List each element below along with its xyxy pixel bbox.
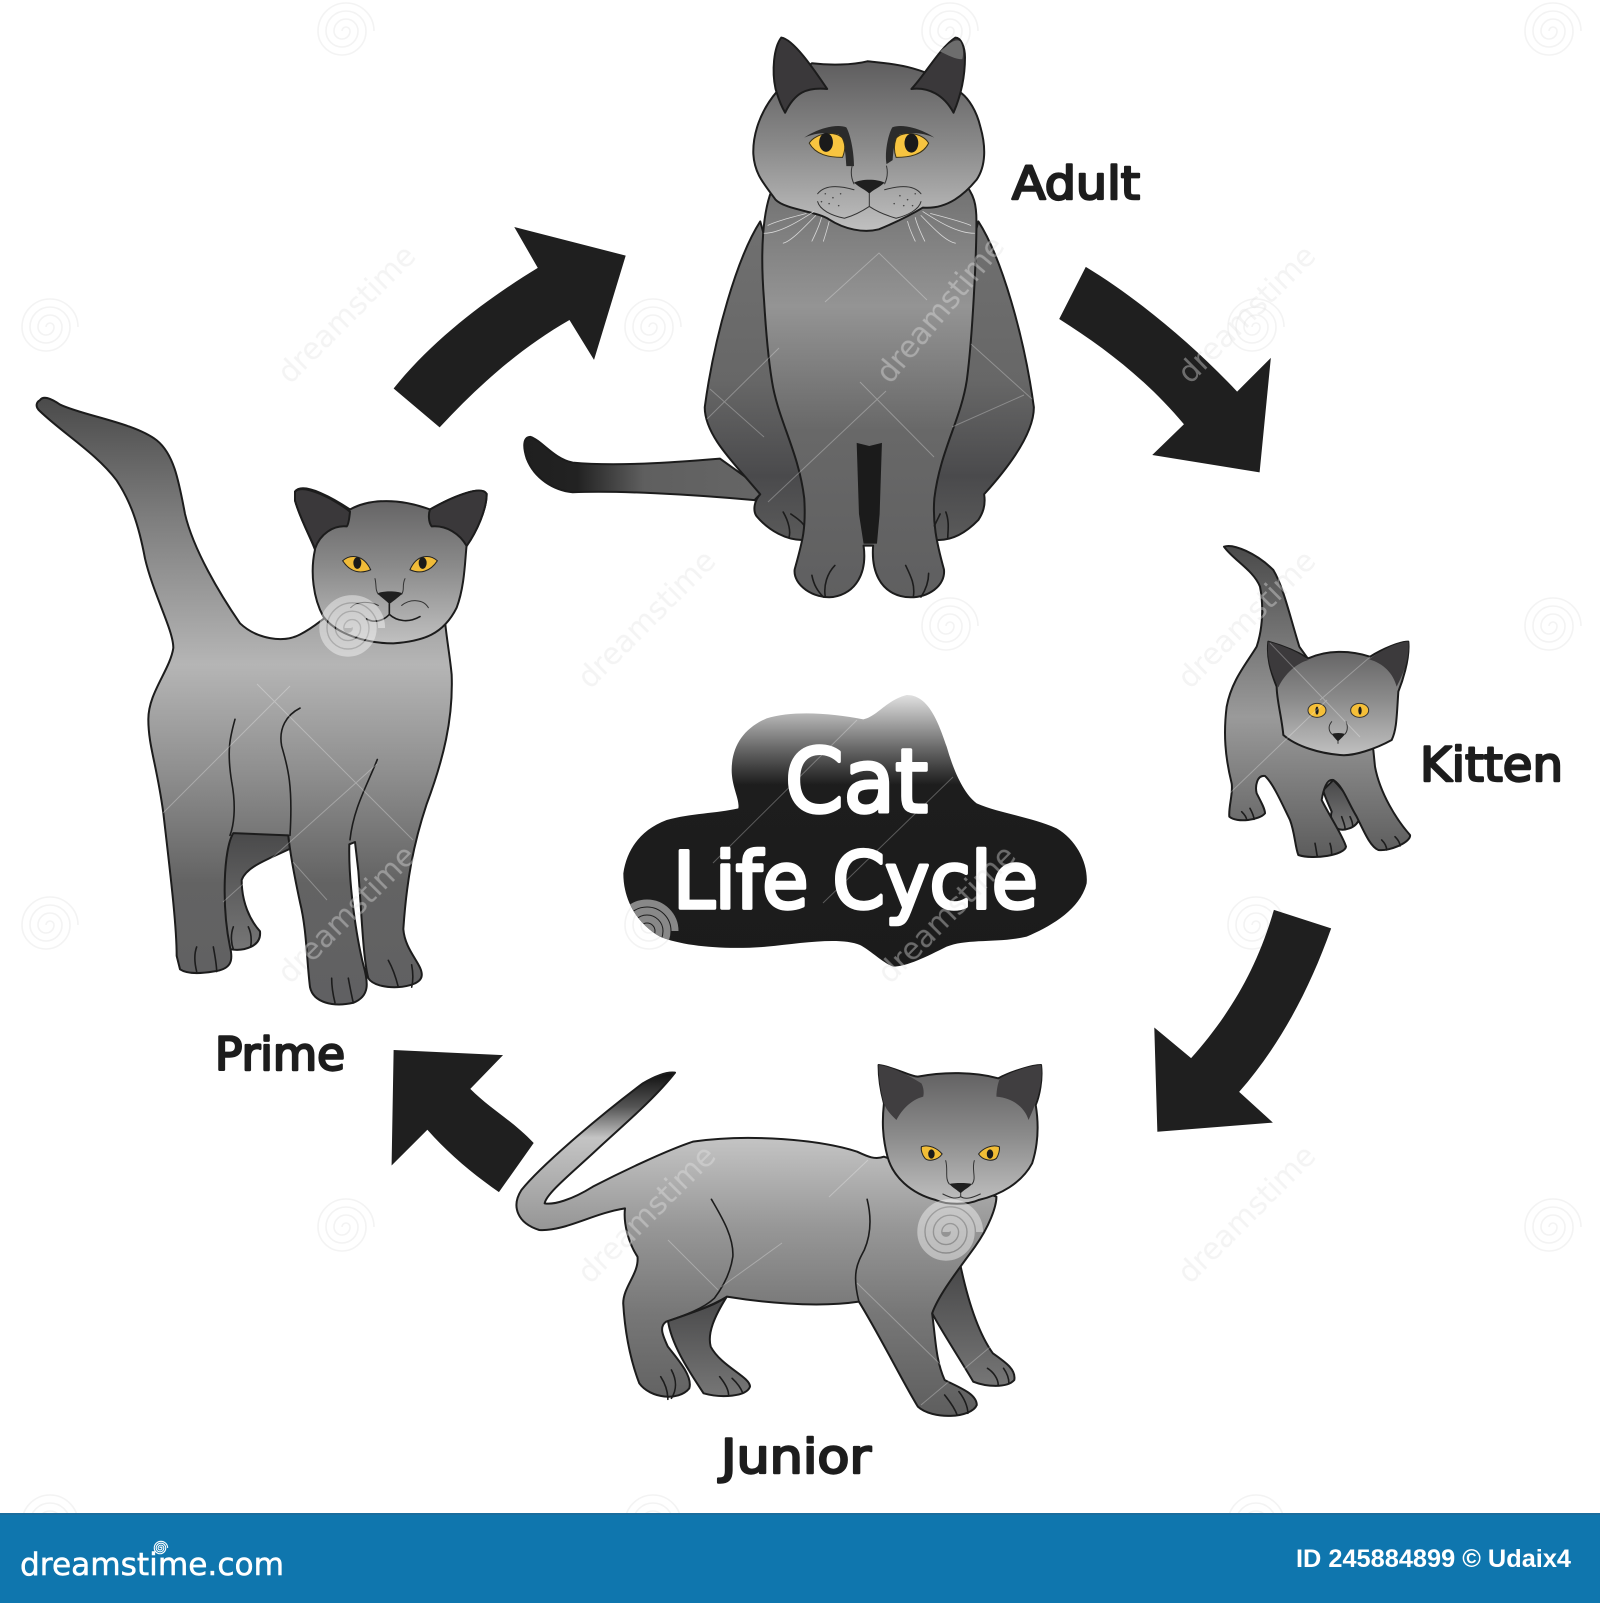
cat: adult xyxy=(524,38,1034,597)
junior right ear xyxy=(996,1065,1042,1120)
junior body contours xyxy=(661,1199,1009,1415)
title blob xyxy=(619,695,1087,967)
arrow: junior to prime xyxy=(392,1050,534,1192)
kitten eyes xyxy=(1308,703,1369,717)
prime right ear xyxy=(429,491,487,546)
prime leg contours xyxy=(195,708,413,1003)
cat: kitten xyxy=(1224,546,1410,857)
kitten head xyxy=(1268,642,1409,755)
adult left ear xyxy=(774,38,827,113)
prime left ear xyxy=(295,489,350,549)
prime eyes xyxy=(343,557,437,572)
label: kitten: Kitten xyxy=(1420,738,1563,793)
kitten body and tail xyxy=(1224,546,1410,857)
adult whiskers xyxy=(764,212,975,243)
kitten nose xyxy=(1329,722,1347,743)
title text: Cat xyxy=(785,730,928,833)
arrow: prime to adult xyxy=(394,227,626,427)
adult muzzle dots xyxy=(821,193,916,206)
kitten rear leg xyxy=(1323,780,1359,830)
adult ear stripe xyxy=(940,40,963,59)
prime rear far leg xyxy=(224,830,290,950)
footer credit: ID 245884899 © Udaix4 xyxy=(1296,1545,1571,1573)
adult eyes xyxy=(804,126,934,166)
title text xyxy=(673,730,1038,927)
arrows xyxy=(392,227,1331,1192)
adult leg gap xyxy=(857,443,882,544)
watermark text: dreamstime xyxy=(869,230,1012,390)
prime nose and mouth xyxy=(351,579,428,621)
watermark text: dreamstime xyxy=(1171,238,1323,391)
watermark text: dreamstime xyxy=(571,543,723,696)
footer logo: dreamstime.com xyxy=(20,1547,284,1583)
adult right ear xyxy=(911,38,965,113)
junior eyes xyxy=(921,1146,999,1160)
watermark text: dreamstime xyxy=(871,838,1023,991)
adult paw toes xyxy=(783,512,948,597)
kitten left ear xyxy=(1268,642,1308,687)
adult head xyxy=(753,61,984,231)
arrow: adult to kitten xyxy=(1059,267,1271,472)
adult right haunch xyxy=(913,221,1034,540)
arrow: kitten to junior xyxy=(1154,910,1331,1132)
junior head xyxy=(879,1065,1042,1204)
label: junior: Junior xyxy=(718,1430,872,1485)
adult nose and mouth xyxy=(818,166,921,218)
junior nose xyxy=(943,1161,980,1198)
label: prime: Prime xyxy=(215,1028,345,1081)
watermark text: dreamstime xyxy=(1171,1138,1323,1291)
watermark text: dreamstime xyxy=(1171,543,1323,696)
label: adult: Adult xyxy=(1012,157,1140,210)
cat: prime xyxy=(37,398,487,1004)
junior left ear xyxy=(879,1065,924,1120)
junior rear far leg xyxy=(668,1297,750,1396)
watermark text xyxy=(271,230,1323,1291)
watermark text: dreamstime xyxy=(571,1138,723,1291)
prime head xyxy=(295,488,487,643)
adult tail xyxy=(524,437,764,500)
watermark text: dreamstime xyxy=(271,238,423,391)
adult left haunch xyxy=(705,221,825,540)
watermark cross lines xyxy=(163,253,1370,1405)
title text: Life Cycle xyxy=(673,837,1038,927)
junior body and tail xyxy=(517,1072,996,1416)
watermark text: dreamstime xyxy=(271,838,423,991)
kitten right ear xyxy=(1369,642,1409,687)
prime body and tail xyxy=(37,398,452,1004)
adult chest and front legs xyxy=(762,182,976,597)
kitten toes xyxy=(1242,808,1400,857)
footer bar xyxy=(0,1513,1600,1603)
junior front far leg xyxy=(932,1267,1015,1386)
cat: junior xyxy=(517,1065,1042,1416)
large spirals over cats xyxy=(323,599,980,1257)
